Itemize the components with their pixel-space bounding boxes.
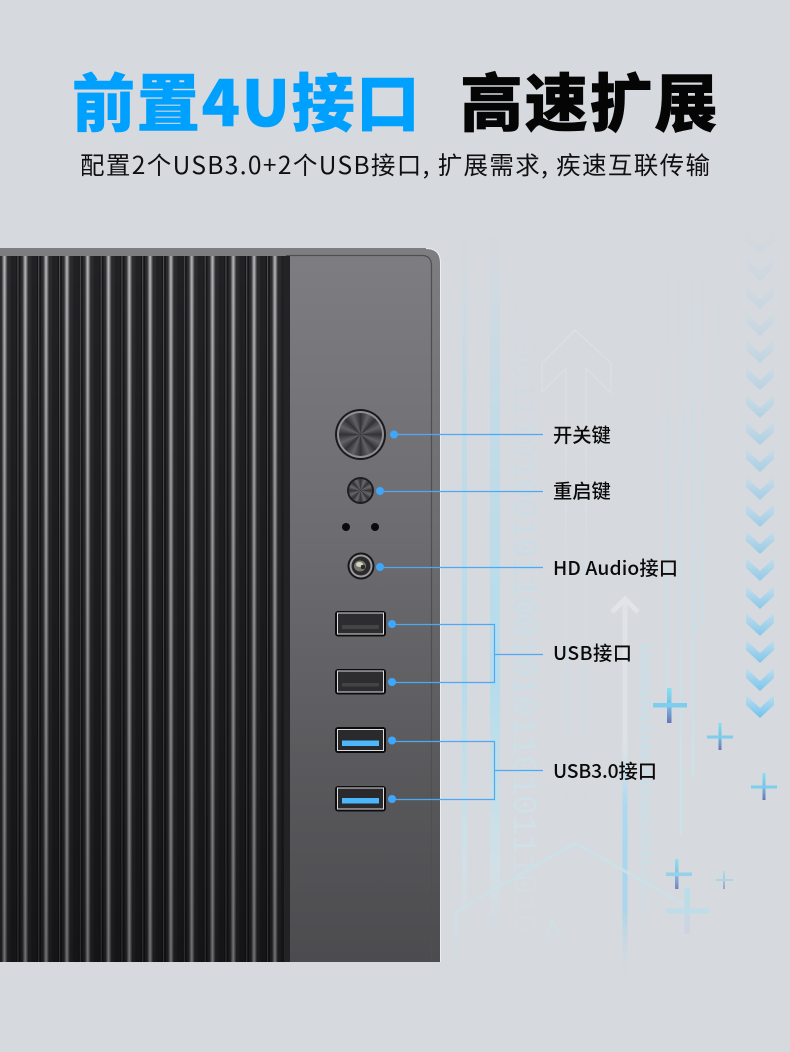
binary column large: 100011101001011001010110101110101 [504,300,541,954]
case body [0,248,440,962]
label: USB: USB接口 [553,638,632,666]
title [72,54,719,145]
ventilation fins [0,256,290,962]
labels [553,420,678,784]
USB 3.0 port 2 [335,786,386,812]
background tech decoration [456,230,777,990]
line: reset [380,490,543,492]
connector lines [380,434,543,800]
connector dots [376,430,398,803]
chevron column [746,231,774,718]
label: power: 开关键 [553,420,611,448]
plus marks [653,688,777,934]
bracket: USB3.0 [392,742,543,800]
case edge highlight [426,248,440,962]
subtitle: 配置2个USB3.0+2个USB接口, 扩展需求, 疾速互联传输 [80,147,710,182]
title blue part: 前置4U接口 [72,54,421,145]
power button metal ring [337,411,384,458]
power button [335,409,386,460]
line: audio [380,566,543,568]
reset button face [349,479,372,502]
circuit lines [667,240,730,835]
power button brushed face [339,413,382,456]
computer case front [0,248,440,962]
label: USB3.0: USB3.0接口 [553,756,657,784]
bezel inner line [286,256,432,962]
audio jack [348,552,374,580]
USB port 1 [335,611,386,636]
solid up arrow [612,599,638,985]
bracket: USB [392,624,543,682]
vertical light strips [462,230,500,980]
label: reset: 重启键 [553,476,611,504]
USB 3.0 port 1 [335,727,386,753]
indicator holes [342,523,379,531]
binary column small: 10100100101001010100101011010011011 [635,642,653,957]
outline up arrow [542,330,611,980]
label: audio: HD Audio接口 [553,553,678,581]
line: power [394,434,543,436]
reset button [347,477,374,504]
title black part: 高速扩展 [460,54,719,145]
USB port 2 [335,669,386,694]
house outline [456,843,685,990]
